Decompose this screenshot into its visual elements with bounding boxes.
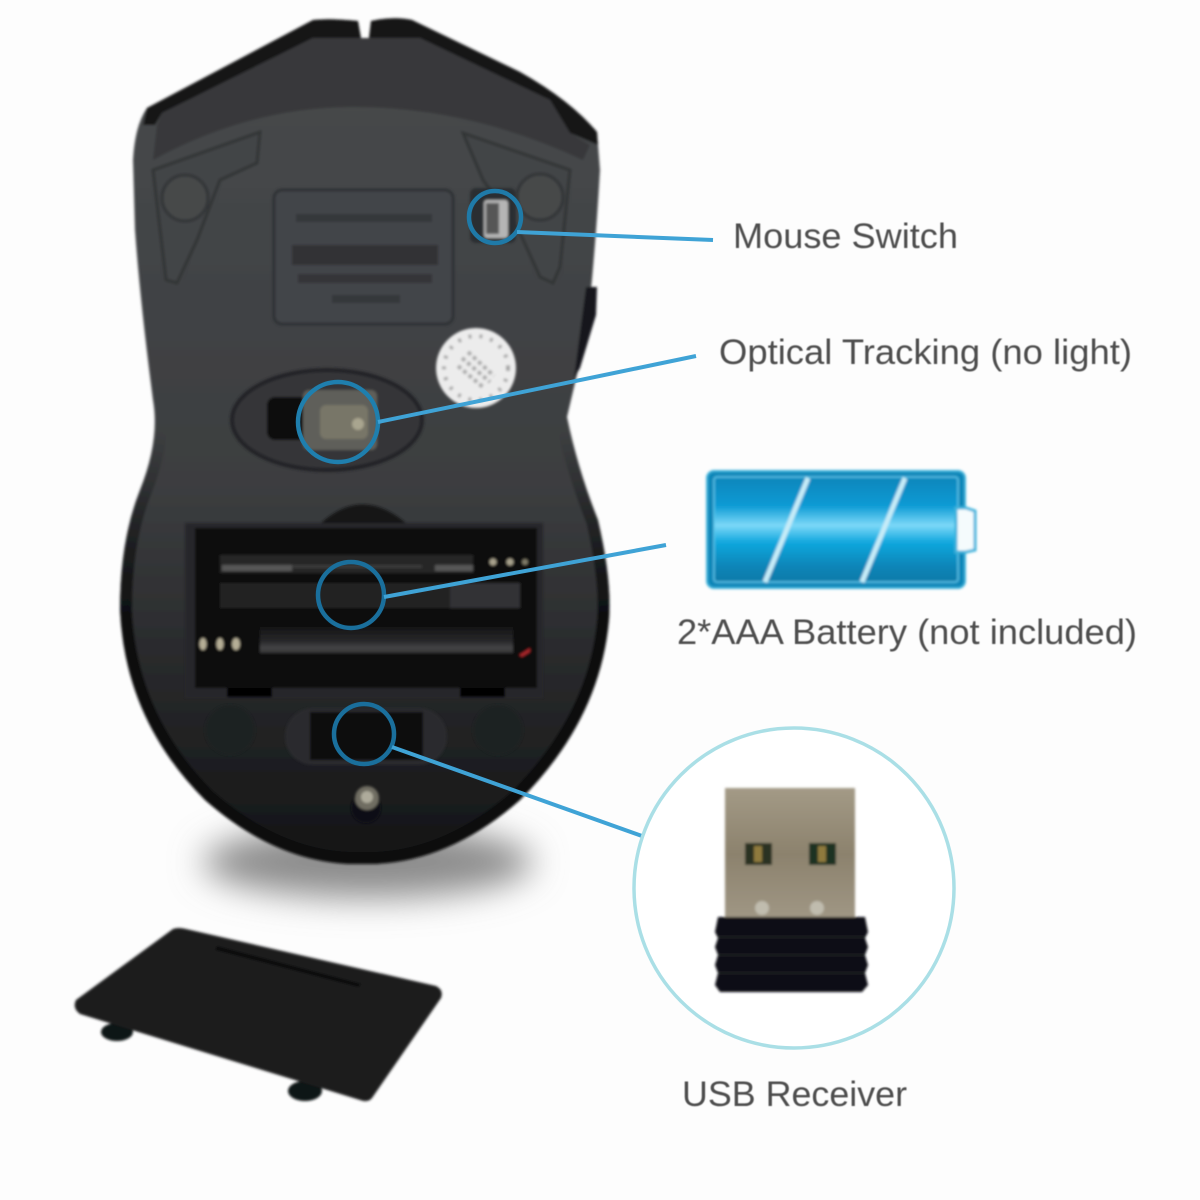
optical sensor recess <box>232 370 422 470</box>
top black rim <box>143 18 598 145</box>
line: mouse switch <box>517 232 713 240</box>
round white sticker <box>436 328 516 408</box>
usb receiver circle <box>634 728 954 1048</box>
battery icon <box>707 471 975 588</box>
line: usb receiver <box>392 747 642 836</box>
round pads <box>205 705 523 755</box>
foot circle right <box>517 174 563 220</box>
top grey panel <box>153 38 590 160</box>
switch callout ring <box>469 191 521 243</box>
left foot pad <box>153 132 260 283</box>
battery compartment <box>185 504 543 698</box>
line: optical tracking <box>378 356 696 422</box>
label: usb receiver: USB Receiver <box>682 1075 907 1114</box>
usb receiver <box>715 788 868 992</box>
dark lower rim <box>118 452 611 865</box>
battery cover <box>75 928 442 1101</box>
label: optical tracking: Optical Tracking (no light) <box>719 333 1132 372</box>
sensor callout ring <box>298 382 378 462</box>
receiver slot <box>285 708 447 765</box>
label: battery: 2*AAA Battery (not included) <box>677 613 1137 652</box>
foot circle left <box>162 175 208 221</box>
label: mouse switch: Mouse Switch <box>733 217 958 256</box>
line: battery <box>384 545 666 597</box>
mouse body underside <box>120 18 610 864</box>
mouse switch <box>470 188 516 243</box>
mouse shadow <box>203 826 533 898</box>
receiver callout ring <box>334 704 394 764</box>
screw <box>351 786 381 823</box>
label plate <box>274 190 453 324</box>
side scroll edge <box>574 287 597 378</box>
battery callout ring <box>318 562 384 628</box>
right foot pad <box>463 133 570 283</box>
